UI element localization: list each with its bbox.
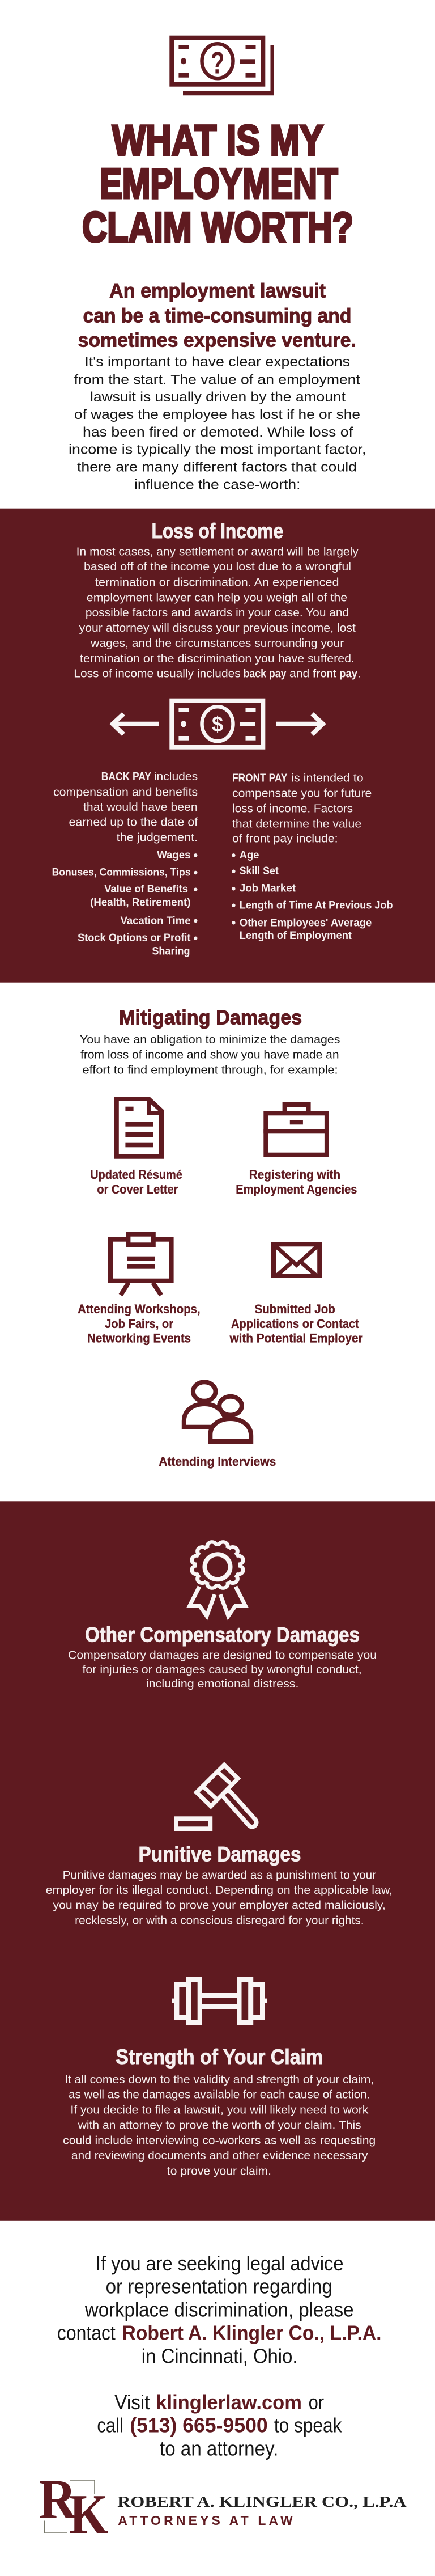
visit and call text: klinglerlaw.com: [156, 2391, 302, 2414]
visit and call text: Visit: [114, 2391, 150, 2414]
logo: Robert A. Klingler Co.: R: [39, 2468, 77, 2530]
loss of income text: back pay: [244, 667, 287, 680]
logo: Robert A. Klingler Co.: [39, 2468, 407, 2545]
intro text: lawsuit is usually driven by the amount: [90, 390, 346, 405]
mitigating damages text: You have an obligation to minimize the damages: [80, 1033, 340, 1046]
icon: dumbbell: [172, 1977, 267, 2025]
visit and call text: to an attorney.: [160, 2437, 278, 2460]
front pay column: FRONT PAY: [232, 771, 288, 784]
contact text: workplace discrimination, please: [84, 2298, 353, 2321]
subheading: sometimes expensive venture.: [78, 329, 356, 352]
label: attending workshops: Attending Workshops,: [78, 1302, 201, 1316]
strength of claim text: as well as the damages available for each cause of action.: [69, 2088, 370, 2101]
icon: left arrow: [113, 714, 159, 734]
label: attending workshops: Networking Events: [87, 1331, 191, 1346]
punitive damages text: you may be required to prove your employer acted maliciously,: [53, 1899, 386, 1912]
loss of income text: termination or discrimination. An experienced: [95, 576, 339, 589]
icon: banknote with dollar sign: [172, 701, 263, 747]
strength of claim text: to prove your claim.: [167, 2164, 271, 2177]
front pay column: Other Employees' Average: [240, 916, 372, 929]
compensatory damages text: [68, 1649, 377, 1690]
label: submitted job applications: [229, 1302, 363, 1346]
contact text: or representation regarding: [106, 2275, 332, 2298]
label: registering with agencies: Employment Agencies: [236, 1182, 357, 1196]
loss of income text: possible factors and awards in your case. You and: [86, 606, 349, 619]
section: call to action: [39, 2252, 407, 2545]
icon: briefcase: [263, 1105, 329, 1155]
contact text: contact: [57, 2321, 116, 2345]
loss of income text: termination or the discrimination you have suffered.: [80, 652, 355, 665]
label: registering with agencies: Registering with: [249, 1168, 340, 1182]
strength of claim text: It all comes down to the validity and strength of your claim,: [65, 2073, 374, 2086]
strength of claim text: with an attorney to prove the worth of your claim. This: [78, 2119, 361, 2132]
contact text: [57, 2252, 381, 2368]
loss of income text: front pay: [313, 667, 358, 680]
icon: envelope: [274, 1244, 319, 1276]
icon: two people: [184, 1382, 251, 1441]
logo: Robert A. Klingler Co.: K: [69, 2482, 108, 2545]
label: registering with agencies: [236, 1168, 357, 1196]
logo: Robert A. Klingler Co.: ROBERT A. KLINGLER CO., L.P.A: [117, 2493, 407, 2510]
front pay column: Length of Time At Previous Job: [240, 899, 393, 912]
strength of claim text: If you decide to file a lawsuit, you will likely need to work: [70, 2103, 369, 2116]
strength of claim text: and reviewing documents and other evidence necessary: [71, 2149, 368, 2162]
heading: mitigating damages: Mitigating Damages: [119, 1005, 302, 1029]
contact text: Robert A. Klingler Co., L.P.A.: [122, 2321, 382, 2345]
logo: Robert A. Klingler Co.: ATTORNEYS AT LAW: [118, 2513, 293, 2528]
visit and call text: [97, 2391, 342, 2460]
visit and call text: (513) 665-9500: [130, 2414, 268, 2437]
intro text: It's important to have clear expectations: [84, 354, 350, 370]
label: updated resume: [90, 1168, 182, 1196]
front pay column: is intended to: [291, 771, 364, 784]
heading: punitive damages: Punitive Damages: [138, 1842, 301, 1866]
compensatory damages text: including emotional distress.: [146, 1677, 299, 1690]
front pay column: Length of Employment: [240, 929, 352, 942]
visit and call text: or: [309, 2391, 324, 2414]
intro text: income is typically the most important factor,: [69, 442, 366, 458]
icon: banknote with dollar sign: $: [212, 713, 223, 737]
loss of income text: In most cases, any settlement or award will be largely: [76, 545, 359, 558]
back pay column: that would have been: [83, 801, 198, 814]
icon: banknotes with question mark: [172, 38, 274, 95]
section: header: [69, 38, 366, 493]
intro text: from the start. The value of an employment: [74, 372, 360, 387]
title: CLAIM WORTH?: [82, 203, 353, 251]
back pay column: Wages: [157, 849, 191, 861]
section: mitigating damages: [78, 1005, 363, 1469]
front pay column: Skill Set: [240, 865, 279, 877]
title: WHAT IS MY: [112, 116, 323, 164]
front pay column: [232, 771, 393, 942]
label: attending interviews: Attending Interviews: [159, 1454, 276, 1469]
subheading: [78, 280, 356, 352]
intro text: [69, 354, 366, 493]
loss of income text: .: [358, 667, 360, 680]
front pay column: Job Market: [240, 882, 296, 895]
mitigating damages text: effort to find employment through, for example:: [83, 1063, 338, 1076]
compensatory damages text: Compensatory damages are designed to compensate you: [68, 1649, 377, 1662]
heading: strength of your claim: Strength of Your Claim: [116, 2045, 323, 2069]
loss of income text: [74, 545, 361, 680]
back pay column: includes: [154, 770, 198, 783]
loss of income text: your attorney will discuss your previous income, lost: [79, 621, 356, 635]
icon: presentation easel: [110, 1234, 172, 1295]
icon: right arrow: [276, 714, 323, 734]
back pay column: Vacation Time: [121, 915, 191, 927]
loss of income text: and: [289, 667, 309, 680]
intro text: of wages the employee has lost if he or she: [74, 407, 360, 422]
label: updated resume: Updated Résumé: [90, 1168, 182, 1182]
back pay column: [52, 770, 198, 957]
strength of claim text: [63, 2073, 376, 2177]
strength of claim text: could include interviewing co-workers as well as requesting: [63, 2134, 376, 2147]
label: updated resume: or Cover Letter: [97, 1182, 178, 1196]
back pay column: BACK PAY: [101, 770, 151, 783]
front pay column: that determine the value: [232, 817, 361, 830]
label: submitted job applications: Submitted Job: [255, 1302, 335, 1316]
loss of income text: wages, and the circumstances surrounding your: [90, 637, 344, 650]
punitive damages text: employer for its illegal conduct. Depending on the applicable law,: [46, 1884, 393, 1897]
subheading: can be a time-consuming and: [83, 304, 351, 327]
back pay column: Stock Options or Profit: [78, 932, 191, 944]
icon: resume document: [117, 1098, 163, 1157]
front pay column: Age: [240, 849, 259, 861]
loss of income text: employment lawyer can help you weigh all of the: [87, 591, 347, 604]
panel: loss of income: [0, 509, 435, 983]
icon: award rosette: [190, 1540, 245, 1616]
back pay column: (Health, Retirement): [90, 896, 190, 908]
back pay column: Sharing: [152, 945, 190, 957]
punitive damages text: Punitive damages may be awarded as a punishment to your: [63, 1868, 376, 1881]
mitigating damages text: [80, 1033, 340, 1076]
front pay column: loss of income. Factors: [232, 802, 353, 815]
contact text: If you are seeking legal advice: [96, 2252, 343, 2275]
label: submitted job applications: with Potential Employer: [229, 1331, 363, 1346]
back pay column: earned up to the date of: [69, 816, 198, 829]
back pay column: Bonuses, Commissions, Tips: [52, 866, 191, 879]
panel: damages and claim strength: [0, 1501, 435, 2221]
heading: other compensatory damages: Other Compensatory Damages: [85, 1623, 360, 1647]
intro text: there are many different factors that could: [77, 460, 357, 475]
mitigating damages text: from loss of income and show you have made an: [80, 1048, 339, 1061]
label: attending workshops: [78, 1302, 201, 1346]
loss of income text: based off of the income you lost due to a wrongful: [84, 560, 351, 573]
label: attending workshops: Job Fairs, or: [105, 1317, 173, 1331]
back pay column: Value of Benefits: [104, 883, 188, 895]
compensatory damages text: for injuries or damages caused by wrongful conduct,: [83, 1663, 362, 1676]
loss of income text: Loss of income usually includes: [74, 667, 241, 680]
label: submitted job applications: Applications or Contact: [231, 1317, 359, 1331]
icon: gavel: [176, 1765, 252, 1829]
punitive damages text: recklessly, or with a conscious disregard for your rights.: [75, 1914, 364, 1927]
icon: banknotes with question mark: ?: [211, 45, 224, 80]
visit and call text: call: [97, 2414, 123, 2437]
intro text: influence the case-worth:: [134, 477, 300, 493]
contact text: in Cincinnati, Ohio.: [142, 2344, 298, 2368]
back pay column: the judgement.: [117, 831, 198, 844]
title: EMPLOYMENT: [100, 160, 338, 208]
intro text: has been fired or demoted. While loss of: [83, 425, 353, 440]
title: [82, 116, 353, 251]
back pay column: compensation and benefits: [53, 785, 198, 798]
punitive damages text: [46, 1868, 393, 1927]
front pay column: compensate you for future: [232, 787, 372, 800]
visit and call text: to speak: [274, 2414, 342, 2437]
heading: loss of income: Loss of Income: [152, 519, 283, 543]
front pay column: of front pay include:: [232, 832, 338, 845]
subheading: An employment lawsuit: [109, 280, 326, 302]
